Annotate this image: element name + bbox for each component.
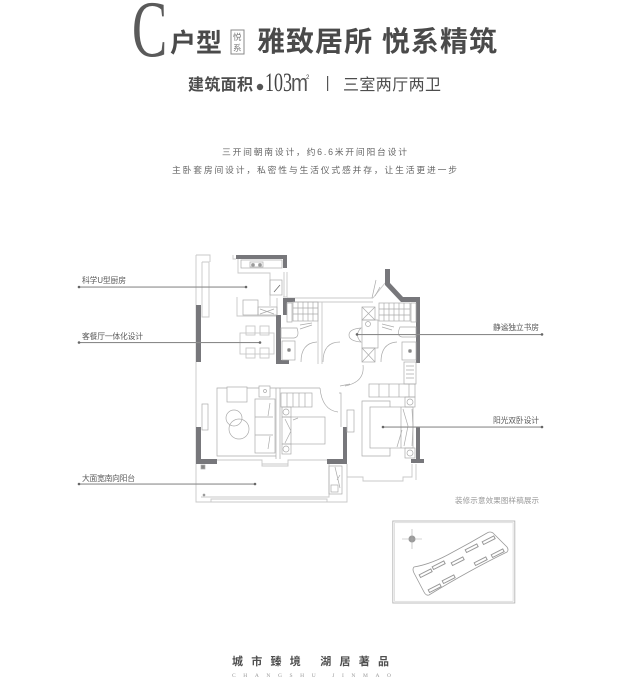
left bathroom	[281, 302, 318, 362]
subtitle: area and layout: 103	[265, 68, 292, 97]
kitchen fixtures	[241, 260, 282, 315]
footer slogan: 城市臻境 湖居著品	[232, 654, 389, 668]
callout: study: 静谧独立书房	[493, 322, 539, 332]
subtitle: area and layout: 建筑面积	[188, 75, 253, 94]
walls	[196, 255, 424, 464]
callout: kitchen: 科学U型厨房	[82, 275, 126, 285]
title: main heading: 雅致居所 悦系精筑	[257, 26, 497, 57]
right bedroom bed	[345, 362, 416, 458]
balcony fixtures	[201, 465, 342, 496]
subtitle: area and layout	[188, 68, 441, 97]
subtitle: area and layout: 三室两厅两卫	[343, 76, 441, 94]
callout: balcony: 大面宽南向阳台	[82, 473, 135, 483]
text block: description: 三开间朝南设计，约6.6米开间阳台设计	[222, 146, 407, 157]
text block: description: 主卧套房间设计，私密性与生活仪式感并存，让生活更进一步	[172, 164, 457, 175]
site outline	[413, 532, 508, 595]
icon: compass	[402, 529, 422, 549]
icon: brand seal: 悦	[233, 32, 242, 42]
floor plan	[196, 255, 424, 502]
floor plan outer outline	[196, 255, 416, 502]
site plan map	[393, 521, 515, 603]
subtitle: area and layout: m	[291, 70, 308, 97]
subtitle: area and layout: 2	[306, 75, 310, 81]
caption: disclaimer: 装修示意效果图样稿展示	[455, 495, 540, 505]
title: unit type: 户型	[170, 28, 222, 58]
text block: description	[172, 146, 457, 175]
site buildings	[419, 536, 504, 593]
living room sofa and rug	[202, 386, 276, 456]
left bedroom bed	[276, 384, 350, 459]
right bathroom	[379, 303, 416, 362]
icon: brand seal: 系	[233, 43, 242, 53]
dining table and chairs	[240, 326, 274, 358]
callout: bedrooms: 阳光双卧设计	[493, 415, 539, 425]
footer brand: CHANGSHU JINMAO	[232, 673, 391, 679]
callout: living and dining: 客餐厅一体化设计	[82, 331, 143, 341]
middle study	[323, 280, 380, 362]
icon: brand seal	[231, 30, 244, 54]
